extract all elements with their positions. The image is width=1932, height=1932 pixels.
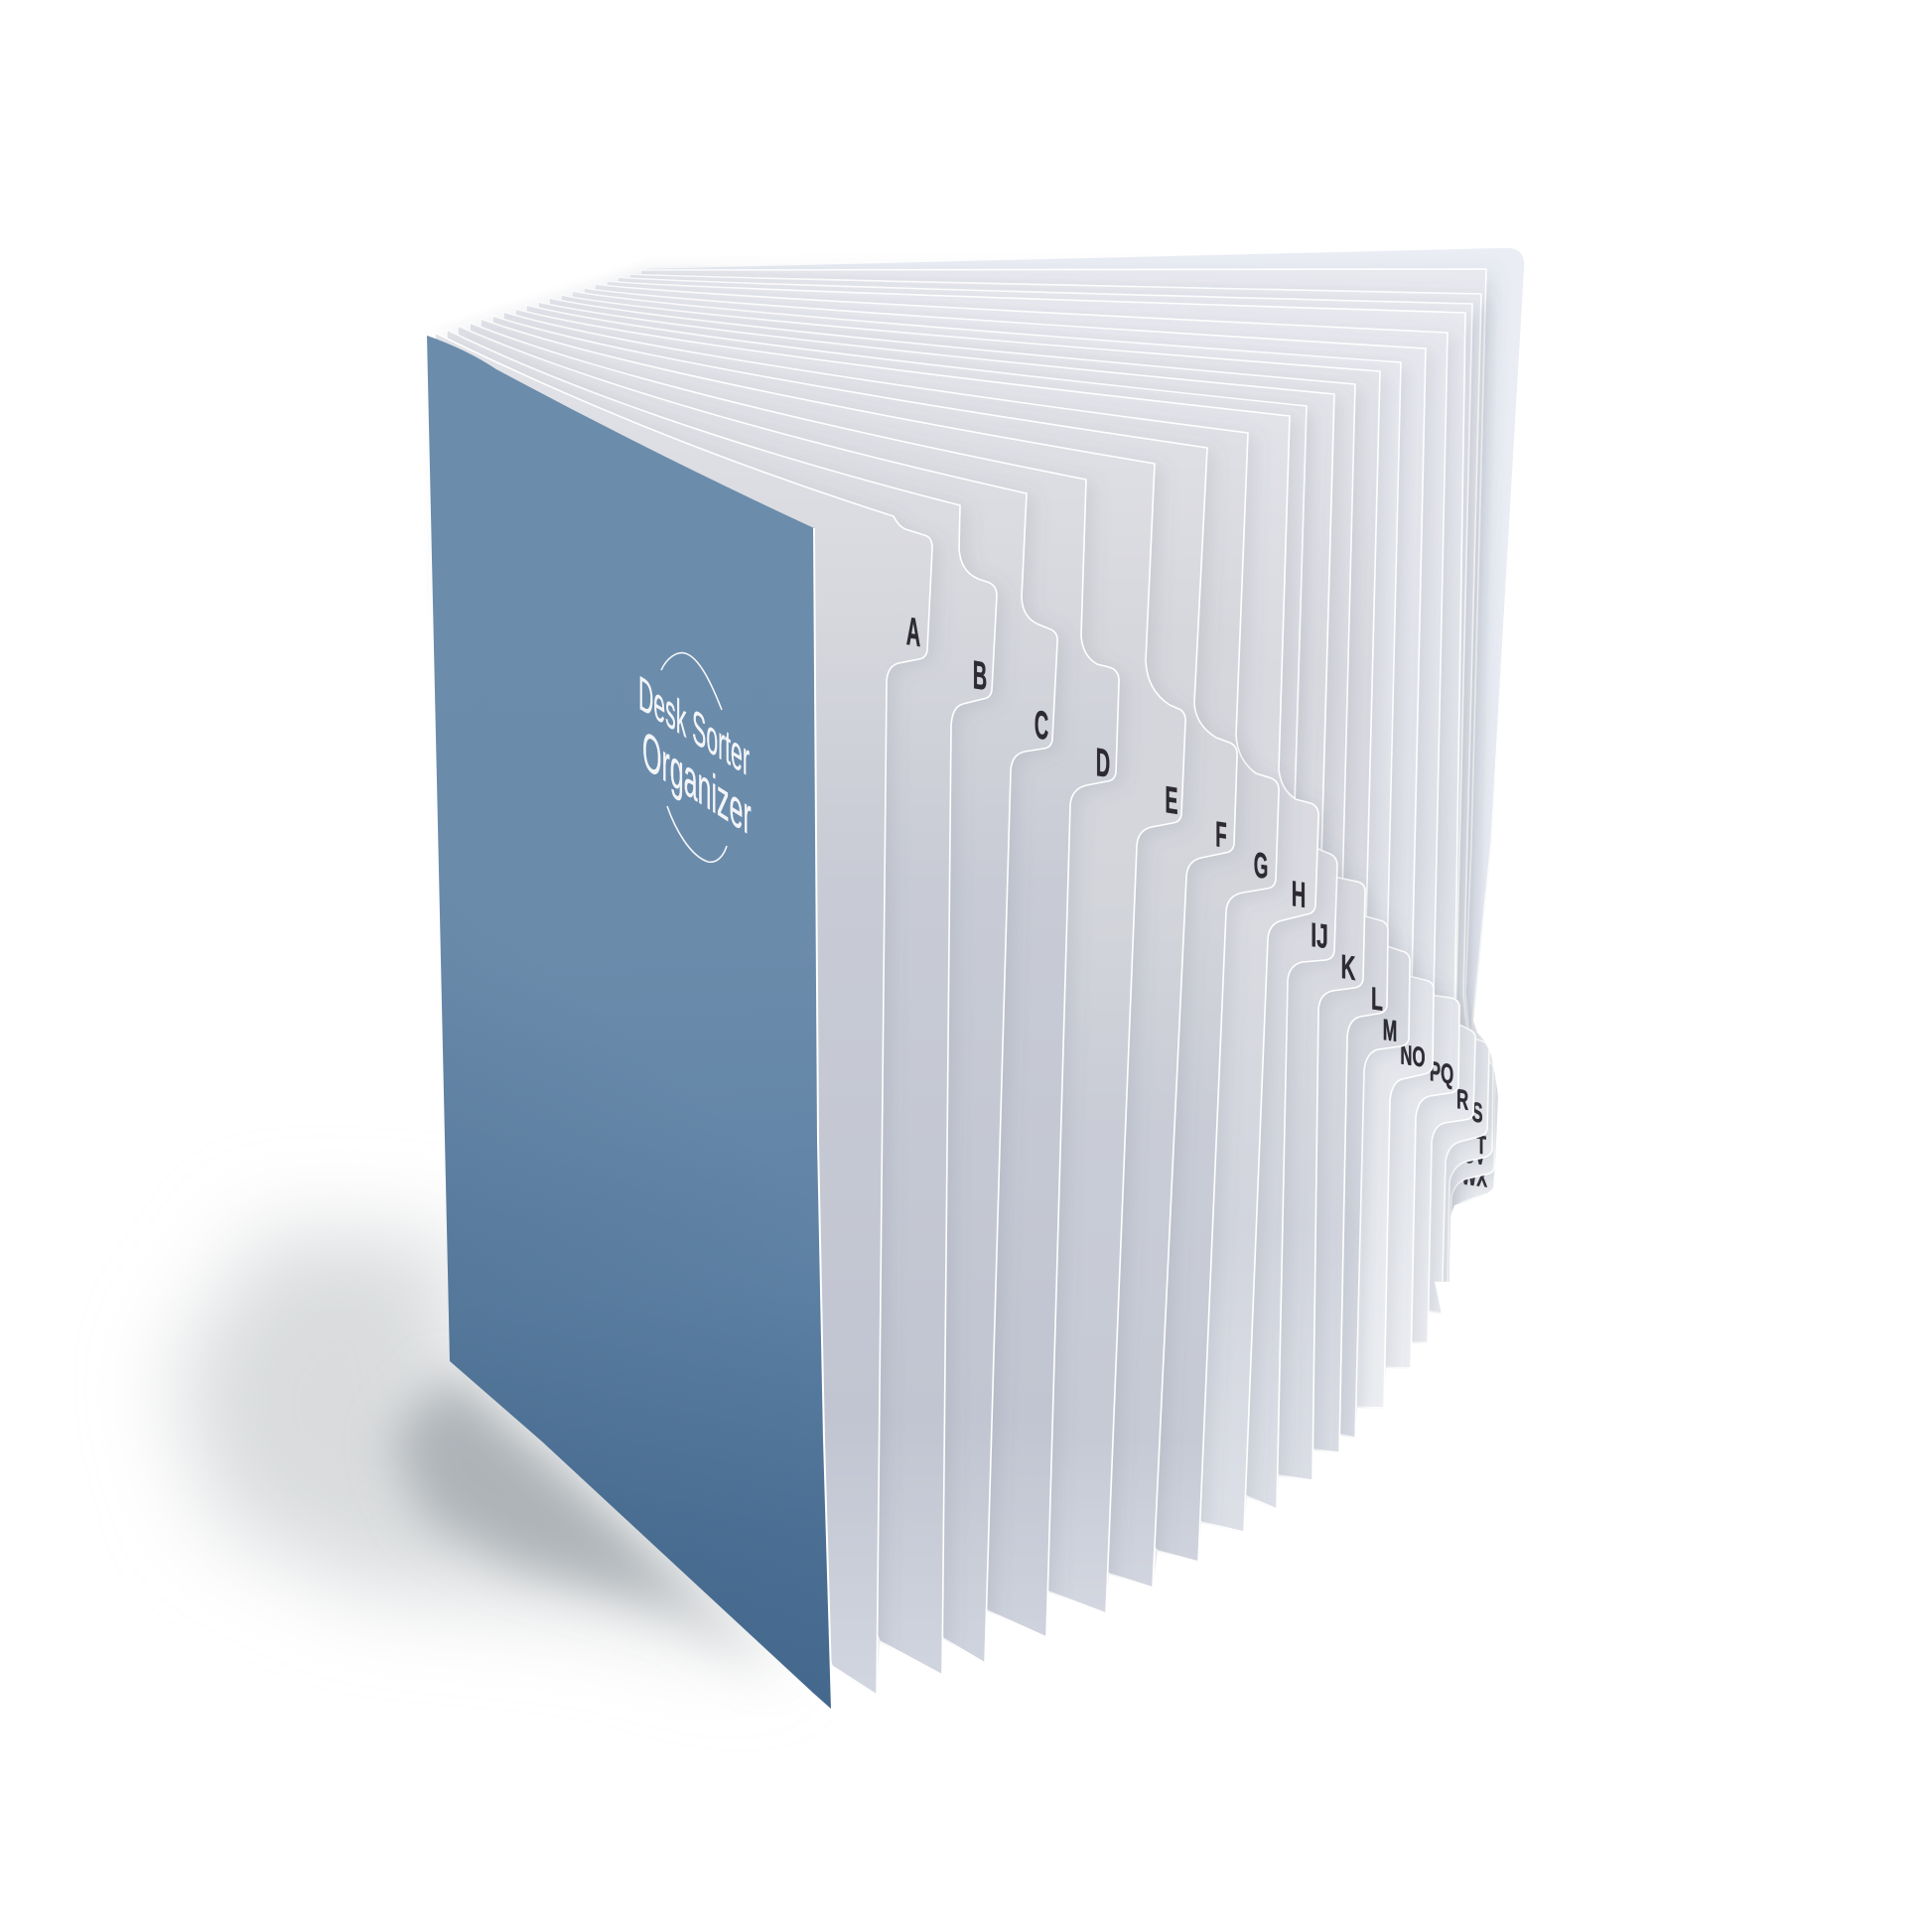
logo text line 2: Organizer xyxy=(642,720,752,849)
logo text line 1: Desk Sorter xyxy=(638,665,750,788)
divider page: G: G xyxy=(1254,846,1268,888)
divider page: IJ xyxy=(526,305,1337,1509)
divider page: H xyxy=(515,309,1318,1532)
logo upper arc xyxy=(661,653,722,710)
divider page: L: L xyxy=(1371,980,1383,1018)
divider page: WX xyxy=(640,269,1497,1266)
divider page: S xyxy=(607,281,1489,1313)
divider page: D: D xyxy=(1096,739,1110,786)
divider page: WX: WX xyxy=(1461,1160,1487,1193)
divider page: B xyxy=(447,330,997,1675)
logo lower arc xyxy=(667,806,727,862)
divider page: R xyxy=(595,284,1475,1342)
divider page: PQ: PQ xyxy=(1430,1055,1453,1090)
divider page: UV: UV xyxy=(1463,1139,1486,1171)
divider page: B: B xyxy=(973,651,987,699)
divider page: S: S xyxy=(1471,1096,1483,1129)
divider page: A xyxy=(435,333,932,1695)
divider page: K: K xyxy=(1341,948,1356,988)
divider page: NO: NO xyxy=(1400,1038,1426,1073)
divider page: E xyxy=(481,319,1185,1613)
blue front cover xyxy=(427,336,832,1710)
divider page: M: M xyxy=(1383,1014,1397,1048)
divider page: L xyxy=(549,298,1388,1452)
divider page: A: A xyxy=(906,608,920,655)
white background mask beyond page tips xyxy=(832,243,1932,1932)
back cover sheet xyxy=(645,247,1525,1266)
divider page: D xyxy=(470,323,1119,1637)
divider page: T: T xyxy=(1476,1129,1486,1161)
divider page: IJ: IJ xyxy=(1311,916,1328,957)
ground shadow xyxy=(174,1231,784,1678)
divider page: F: F xyxy=(1215,815,1227,857)
cover logo: Desk Sorter Organizer xyxy=(638,653,752,862)
divider page: H: H xyxy=(1292,875,1306,916)
divider page: K xyxy=(538,302,1365,1480)
divider page: PQ xyxy=(584,288,1459,1368)
divider page: G xyxy=(503,312,1279,1562)
divider page: C xyxy=(458,326,1057,1663)
divider page: UV xyxy=(629,274,1495,1281)
divider page: T xyxy=(618,277,1493,1291)
divider page: M xyxy=(561,295,1410,1438)
divider page: NO xyxy=(572,291,1434,1408)
divider page: C: C xyxy=(1035,701,1048,749)
divider page: E: E xyxy=(1165,779,1178,823)
divider page: R: R xyxy=(1456,1083,1468,1116)
divider page: F xyxy=(492,316,1237,1587)
